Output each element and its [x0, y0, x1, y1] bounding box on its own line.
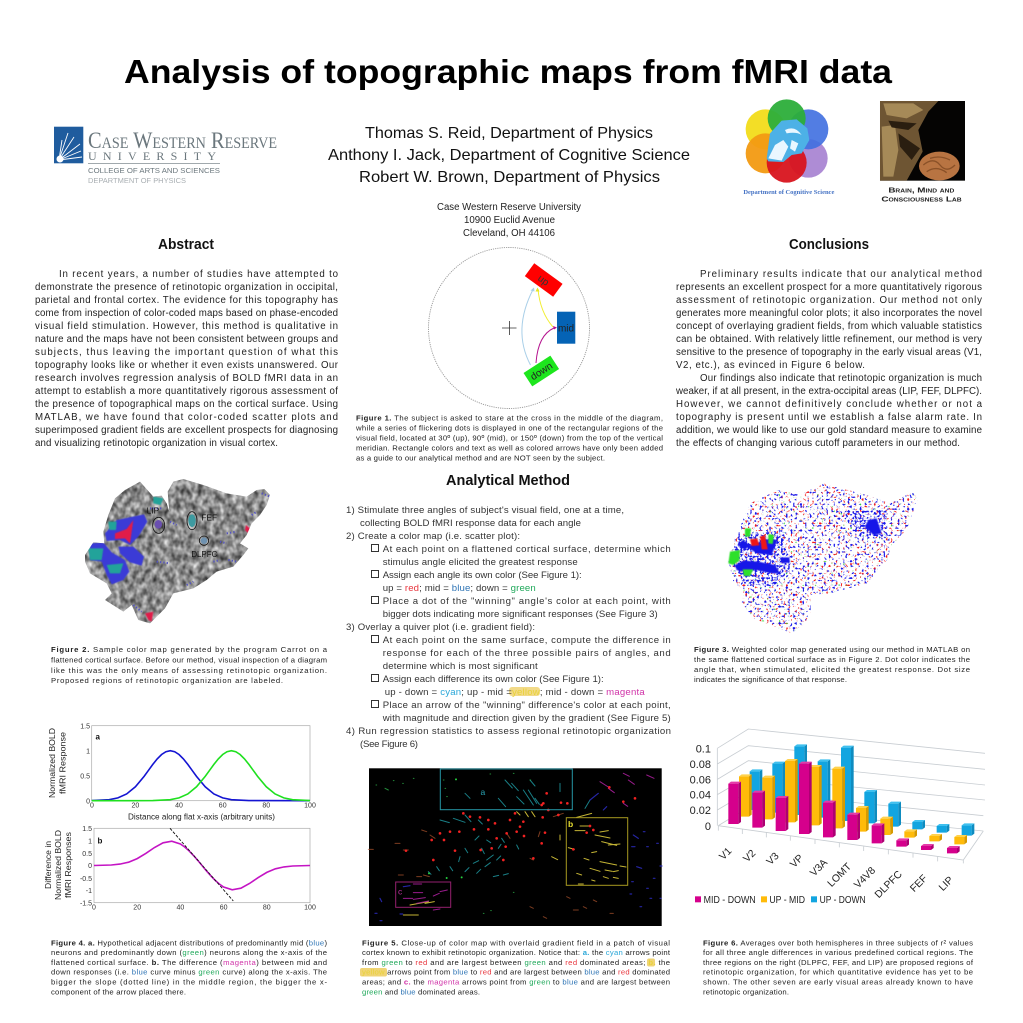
- category labels: V3A: [808, 857, 830, 879]
- analytical method list: Assign each angle its own color (See Figure 1):: [383, 570, 582, 581]
- conclusions text: concept of overlaying gradient fields, from which valuable statistics: [676, 321, 982, 332]
- abstract text: the presence of topographical maps on the cortical surface. Using: [35, 399, 338, 410]
- conclusions text: [675, 269, 983, 449]
- analytical method list: up = red; mid = blue; down = green: [383, 583, 536, 594]
- logo: Department of Cognitive Science: Department of Cognitive Science: [743, 189, 834, 196]
- conclusions text: Preliminary results indicate that our analytical method: [700, 269, 982, 280]
- figure 5 caption: areas; and c. the magenta arrows point from green to blue and are largest between: [362, 978, 670, 987]
- category labels: LOMT: [826, 861, 854, 890]
- conclusions text: assessment of retinotopic organization. Our method not only: [676, 295, 982, 306]
- abstract text: topography looks like or whether it even exists unanswered. Our: [35, 360, 339, 371]
- rectangle: down: down: [529, 361, 555, 383]
- activation blobs: [88, 493, 270, 622]
- y tick labels: 1.5: [82, 826, 92, 833]
- title: Analysis of topographic maps from fMRI data: [124, 53, 893, 90]
- figure 3 caption: indicates the significance of that response.: [694, 675, 847, 684]
- x tick labels: 80: [262, 802, 270, 810]
- conclusions text: the effects of changing various cutoff parameters in our method.: [676, 438, 960, 449]
- blue clusters: [735, 518, 882, 573]
- figure 5: gradient field on black: [368, 768, 662, 926]
- figure 4a: gaussian line chart: [47, 724, 316, 822]
- conclusions text: weaker, if at all present, in the extra-occipital areas (LIP, FEF, DLPFC).: [675, 386, 982, 397]
- authors: Robert W. Brown, Department of Physics: [359, 169, 660, 186]
- blue curve: [92, 751, 310, 801]
- y tick labels: 0.5: [80, 774, 90, 780]
- dense blue dots, right side: [844, 510, 887, 537]
- box c: c: [398, 886, 403, 896]
- blue arrows: [375, 793, 662, 921]
- cyan arrows: [428, 780, 590, 877]
- logo: Case Western Reserve University: COLLEGE OF ARTS AND SCIENCES: [88, 166, 220, 175]
- box a: a: [480, 787, 486, 797]
- y axis title: Normalized BOLD: [47, 728, 57, 798]
- figure 6 caption: retinotopic organization.: [703, 988, 789, 997]
- conclusions text: addition, we would like to use our gold standard measure to examine: [676, 425, 982, 436]
- rectangle: mid: mid: [558, 324, 574, 334]
- figure 2 caption: like this was the only means of assessing retinotopic organization.: [51, 666, 327, 675]
- abstract text: [35, 269, 339, 449]
- figure 4b: difference line chart: [43, 826, 316, 912]
- conclusions text: However, we cannot definitively conclude whether or not a: [676, 399, 983, 410]
- figure 5 caption: yellow arrows point from blue to red and are largest between blue and red dominated: [362, 968, 670, 977]
- logo: Case Western Reserve University: Case Western Reserve: [88, 128, 277, 153]
- value axis labels: 0.1: [696, 743, 711, 755]
- panel letter a: a: [96, 732, 100, 742]
- conclusions text: sensitive to the presence of topography in the early visual areas (V1,: [676, 347, 982, 358]
- magenta curve: [94, 841, 310, 890]
- x tick labels: 60: [220, 904, 228, 912]
- y axis title: [43, 830, 73, 900]
- x tick labels: 40: [177, 904, 184, 912]
- figure 6 caption: for all three angle differences in various predefined cortical regions. The: [703, 948, 973, 957]
- figure 4 caption: neurons and predominantly down (green) neurons along the x-axis of the: [51, 948, 327, 957]
- y axis title: Difference in: [43, 841, 53, 889]
- y tick labels: 1.5: [80, 724, 90, 730]
- figure 2 caption: Proposed regions of retinotopic organization are labeled.: [51, 676, 283, 685]
- figure 1 caption: while a series of flickering dots is displayed in one of the rectangular regions of the: [355, 424, 663, 432]
- arrow: magenta: [536, 326, 557, 363]
- analytical method list: collecting BOLD fMRI response data for each angle: [360, 518, 581, 529]
- abstract text: nature and the maps have not been consistent between groups and: [35, 334, 338, 345]
- category labels: VP: [788, 853, 806, 870]
- analytical method list: Place a dot of the "winning" angle's color at each point, with: [383, 596, 671, 607]
- yellow arrows: [403, 812, 626, 915]
- region ovals: [153, 512, 209, 545]
- checkbox bullets: [372, 544, 378, 708]
- y axis title: [47, 728, 68, 798]
- red clusters: [750, 535, 768, 549]
- y tick labels: 1: [88, 838, 92, 846]
- region labels: FEF: [201, 513, 217, 523]
- y tick labels: 0.5: [82, 851, 92, 858]
- abstract text: attempt to establish a more quantitatively rigorous assessment of: [35, 386, 338, 397]
- figure 6: 3D bar chart: [690, 729, 985, 906]
- y axis title: fMRI Response: [58, 732, 68, 794]
- rectangle: down: [524, 356, 559, 386]
- panel letter b: b: [98, 836, 102, 846]
- figure 5 caption: from green to red and are largest between green and red dominated areas; b. the: [362, 958, 670, 967]
- brain surface: [85, 479, 270, 624]
- figure 1 caption: as a guide to our analytical method and are NOT seen by the subject.: [356, 454, 605, 462]
- logo: Case Western Reserve University: DEPARTMENT OF PHYSICS: [88, 178, 186, 185]
- x tick labels: [90, 802, 316, 810]
- abstract text: visual field stimulation. However, this method is qualitative in: [35, 321, 338, 332]
- figure 4 caption: component of the arrow placed there.: [51, 988, 186, 997]
- y tick labels: 0: [88, 863, 92, 870]
- abstract text: research involves regression analysis of BOLD fMRI data in an: [35, 373, 338, 384]
- abstract text: subjects, thus leaving the important question of what this: [35, 347, 338, 358]
- figure 6 caption: retinotopic organization, for which quantitative evidence has yet to be: [703, 968, 973, 977]
- photo: Brain, Mind and Consciousness Lab: Consciousness Lab: [881, 195, 962, 204]
- value axis labels: [690, 743, 711, 833]
- figure 1 caption: visual field, located at 30º (up), 90º (mid), or 150º (down) from the top of the vertical: [356, 434, 663, 442]
- value axis labels: 0.04: [690, 790, 711, 802]
- figure 4 caption: flattened cortical surface. b. The difference (magenta) between mid and: [51, 958, 327, 967]
- red dots: [406, 787, 635, 860]
- figure 3 caption: Figure 3. Weighted color map generated using our method in MATLAB on: [694, 645, 970, 654]
- y axis title: fMRI Responses: [63, 832, 73, 898]
- blue dots: [727, 480, 920, 637]
- conclusions text: Our findings also indicate that retinotopic organization is much: [700, 373, 982, 384]
- analytical method list: 4) Run regression statistics to assess regional retinotopic organization: [346, 726, 671, 737]
- y tick labels: -1: [86, 888, 92, 895]
- abstract text: superimposed gradient fields are excellent prospects for diagnosing: [35, 425, 338, 436]
- figure 4 caption: Figure 4. a. Hypothetical adjacent distributions of predominantly mid (blue): [51, 938, 327, 947]
- figure 1 caption: Figure 1. The subject is asked to stare at the cross in the middle of the diagram,: [356, 414, 663, 422]
- figure 3 caption: the same flattened cortical surface as in Figure 2. Dot color indicates the: [694, 655, 970, 664]
- category labels: FEF: [908, 873, 930, 895]
- category labels: V1: [718, 846, 734, 863]
- grid walls: [717, 729, 985, 863]
- rectangle: up: [525, 263, 563, 297]
- abstract text: come from inspection of color-coded maps based on phase-encoded: [35, 308, 338, 319]
- category labels: LIP: [937, 875, 956, 894]
- y tick labels: [80, 724, 90, 806]
- analytical method list: (See Figure 6): [360, 739, 418, 750]
- analytical method list: Assign each difference its own color (See Figure 1):: [383, 674, 604, 685]
- abstract text: MATLAB, we have found that color-coded scatter plots and: [35, 412, 338, 423]
- analytical method list: up - down = cyan; up - mid =yellow; mid - down = magenta: [385, 687, 645, 698]
- value axis labels: 0.06: [690, 774, 711, 786]
- category labels: DLPFC: [873, 869, 905, 901]
- yellow highlight: [509, 687, 540, 696]
- authors: Anthony I. Jack, Department of Cognitive Science: [328, 147, 690, 164]
- y tick labels: -1.5: [80, 900, 92, 908]
- arrow: cyan: [522, 288, 534, 365]
- figure 5 caption: [360, 938, 671, 997]
- figure 6 caption: shown. The other seven are early visual areas already known to have: [703, 978, 973, 987]
- analytical method list: with magnitude and direction given by the gradient (See Figure 5): [382, 713, 671, 724]
- green curve: [92, 751, 310, 801]
- figure 2 caption: Figure 2. Sample color map generated by the program Carrot on a: [51, 645, 328, 654]
- rectangle: up: up: [535, 273, 551, 289]
- highlight: yellow: [360, 968, 387, 976]
- x axis title: Distance along flat x-axis (arbitrary units): [128, 812, 275, 822]
- figure 4 caption: [51, 938, 327, 997]
- figure 2 caption: flattened cortical surface. Before our method, visual inspection of a diagram: [51, 656, 327, 664]
- value axis labels: 0.08: [690, 759, 711, 771]
- bright green dots: [429, 779, 462, 878]
- logo: Case Western Reserve University: UNIVERSITY: [88, 149, 216, 163]
- x tick labels: 20: [132, 802, 139, 810]
- abstract text: demonstrate the presence of retinotopic organization in occipital,: [35, 282, 338, 293]
- amber series: UP - MID: [739, 759, 967, 844]
- x tick labels: 20: [133, 904, 141, 912]
- address: Cleveland, OH 44106: [463, 228, 555, 239]
- highlight: b.: [647, 958, 655, 966]
- magenta series: MID - DOWN: [728, 762, 960, 853]
- abstract text: and visualizing retinotopic organization in visual cortex.: [35, 438, 278, 449]
- heading: Conclusions: Conclusions: [789, 237, 869, 253]
- x tick labels: 60: [219, 802, 227, 810]
- analytical method list: At each point on a flattened cortical surface, determine which: [383, 544, 671, 555]
- region labels: LIP: [147, 506, 160, 516]
- magenta arrows: [403, 773, 654, 910]
- box b: b: [568, 819, 573, 829]
- x tick labels: 100: [304, 904, 316, 912]
- conclusions text: topography is present until we establish a false alarm rate. In: [676, 412, 982, 423]
- figure 3 caption: angle that, when stimulated, elicited the greatest response. Dot size: [694, 665, 970, 674]
- analytical method list: At each point on the same surface, compute the difference in: [383, 635, 671, 646]
- x tick labels: 100: [304, 802, 316, 810]
- authors: [328, 125, 690, 186]
- address: Case Western Reserve University: [437, 202, 581, 213]
- figure 3 caption: [694, 645, 970, 684]
- category labels: [718, 846, 956, 901]
- region labels: [147, 506, 217, 559]
- analytical method list: 1) Stimulate three angles of subject's visual field, one at a time,: [346, 505, 624, 516]
- figure 4 caption: down responses (i.e. blue curve minus green curve) along the x-axis. The: [51, 968, 327, 977]
- legend: [695, 895, 866, 906]
- category labels: V2: [742, 848, 758, 865]
- logo: Case Western Reserve University: [54, 127, 277, 185]
- figure 5 caption: Figure 5. Close-up of color map with overlaid gradient field in a patch of visual: [362, 938, 670, 947]
- x tick labels: 40: [175, 802, 183, 810]
- rectangle: mid: [557, 312, 575, 344]
- figure 6 caption: [703, 938, 974, 997]
- figure 1: visual field diagram: [428, 248, 590, 408]
- red dots: [727, 480, 920, 637]
- conclusions text: can be obtained. With relatively little refinement, our method is very: [676, 334, 982, 345]
- analytical method list: bigger dots indicating more significant responses (See Figure 3): [383, 609, 658, 620]
- address: 10900 Euclid Avenue: [464, 215, 555, 226]
- y tick labels: [80, 826, 92, 908]
- figure 5 caption: green and blue dominated areas.: [362, 988, 480, 997]
- y tick labels: 1: [86, 748, 90, 756]
- legend: UP - MID: [769, 895, 805, 906]
- y axis title: Normalized BOLD: [53, 830, 63, 900]
- heading: Abstract: Abstract: [158, 237, 214, 253]
- y tick labels: -0.5: [80, 876, 92, 883]
- x tick labels: 0: [92, 904, 96, 912]
- figure 2 caption: [51, 645, 328, 685]
- figure 2: cortical surface colour map: [85, 479, 270, 624]
- legend: UP - DOWN: [820, 895, 866, 906]
- analytical method list: Place an arrow of the "winning" difference's color at each point,: [383, 700, 671, 711]
- y tick labels: 0: [86, 798, 90, 806]
- green-tipped small arrows: [376, 773, 531, 913]
- figure 1 caption: meridian. Rectangle colors and text as well as colored arrows have only been added: [356, 444, 663, 452]
- region labels: DLPFC: [191, 549, 217, 559]
- value axis labels: 0.02: [690, 805, 711, 817]
- green clusters: [728, 528, 774, 576]
- orange and tan arrows: [368, 813, 613, 918]
- blue series: UP - DOWN: [750, 744, 974, 836]
- analytical method list: response for each of the three possible pairs of angles, and: [383, 648, 671, 659]
- figure 6 caption: three regions on the right (DLPFC, FEF, and LIP) are proposed regions of: [703, 958, 974, 967]
- figure 3: scatter colour map: [727, 480, 920, 637]
- green dots: [732, 488, 916, 632]
- arrow: yellow: [536, 288, 553, 327]
- box a: [440, 769, 572, 810]
- abstract text: In recent years, a number of studies have attempted to: [59, 269, 338, 280]
- address: [437, 202, 581, 239]
- value axis labels: 0: [705, 821, 711, 833]
- figure 5 caption: cortex known to exhibit retinotopic organization. Notice that: a. the cyan arrows point: [362, 948, 671, 957]
- x tick labels: 80: [263, 904, 271, 912]
- dotted slope line: [170, 828, 233, 901]
- x tick labels: [92, 904, 316, 912]
- authors: Thomas S. Reid, Department of Physics: [365, 125, 653, 142]
- figure 6 caption: Figure 6. Averages over both hemispheres in three subjects of r² values: [703, 938, 973, 947]
- photo: Brain, Mind and Consciousness Lab: Brain, Mind and: [888, 186, 955, 195]
- figure 1 caption: [355, 414, 663, 462]
- legend: MID - DOWN: [704, 895, 756, 906]
- x tick labels: 0: [90, 802, 94, 810]
- dense blue dots, left side: [734, 530, 790, 586]
- photo: Brain, Mind and Consciousness Lab: [880, 101, 965, 204]
- conclusions text: represents an excellent prospect for a more quantitatively rigorous: [676, 282, 982, 293]
- analytical method list: 2) Create a color map (i.e. scatter plot):: [346, 531, 520, 542]
- abstract text: parietal and frontal cortex. The evidence for this topography has: [35, 295, 338, 306]
- heading: Analytical Method: Analytical Method: [446, 473, 570, 489]
- conclusions text: V2, etc.), as evinced in Figure 6 below.: [676, 360, 865, 371]
- analytical method list: stimulus angle elicited the greatest response: [383, 557, 578, 568]
- box b: [566, 818, 628, 885]
- logo: Department of Cognitive Science: [743, 99, 834, 196]
- category labels: V4V8: [852, 865, 878, 891]
- figure 4 caption: bigger the slope (dotted line) in the middle region, the bigger the x-: [51, 978, 327, 987]
- analytical method list: [346, 505, 671, 750]
- analytical method list: determine which is most significant: [383, 661, 538, 672]
- analytical method list: 3) Overlay a quiver plot (i.e. gradient field):: [346, 622, 535, 633]
- category labels: V3: [765, 851, 782, 868]
- conclusions text: generates more meaningful color plots; it also incorporates the novel: [676, 308, 982, 319]
- box c: [396, 882, 451, 907]
